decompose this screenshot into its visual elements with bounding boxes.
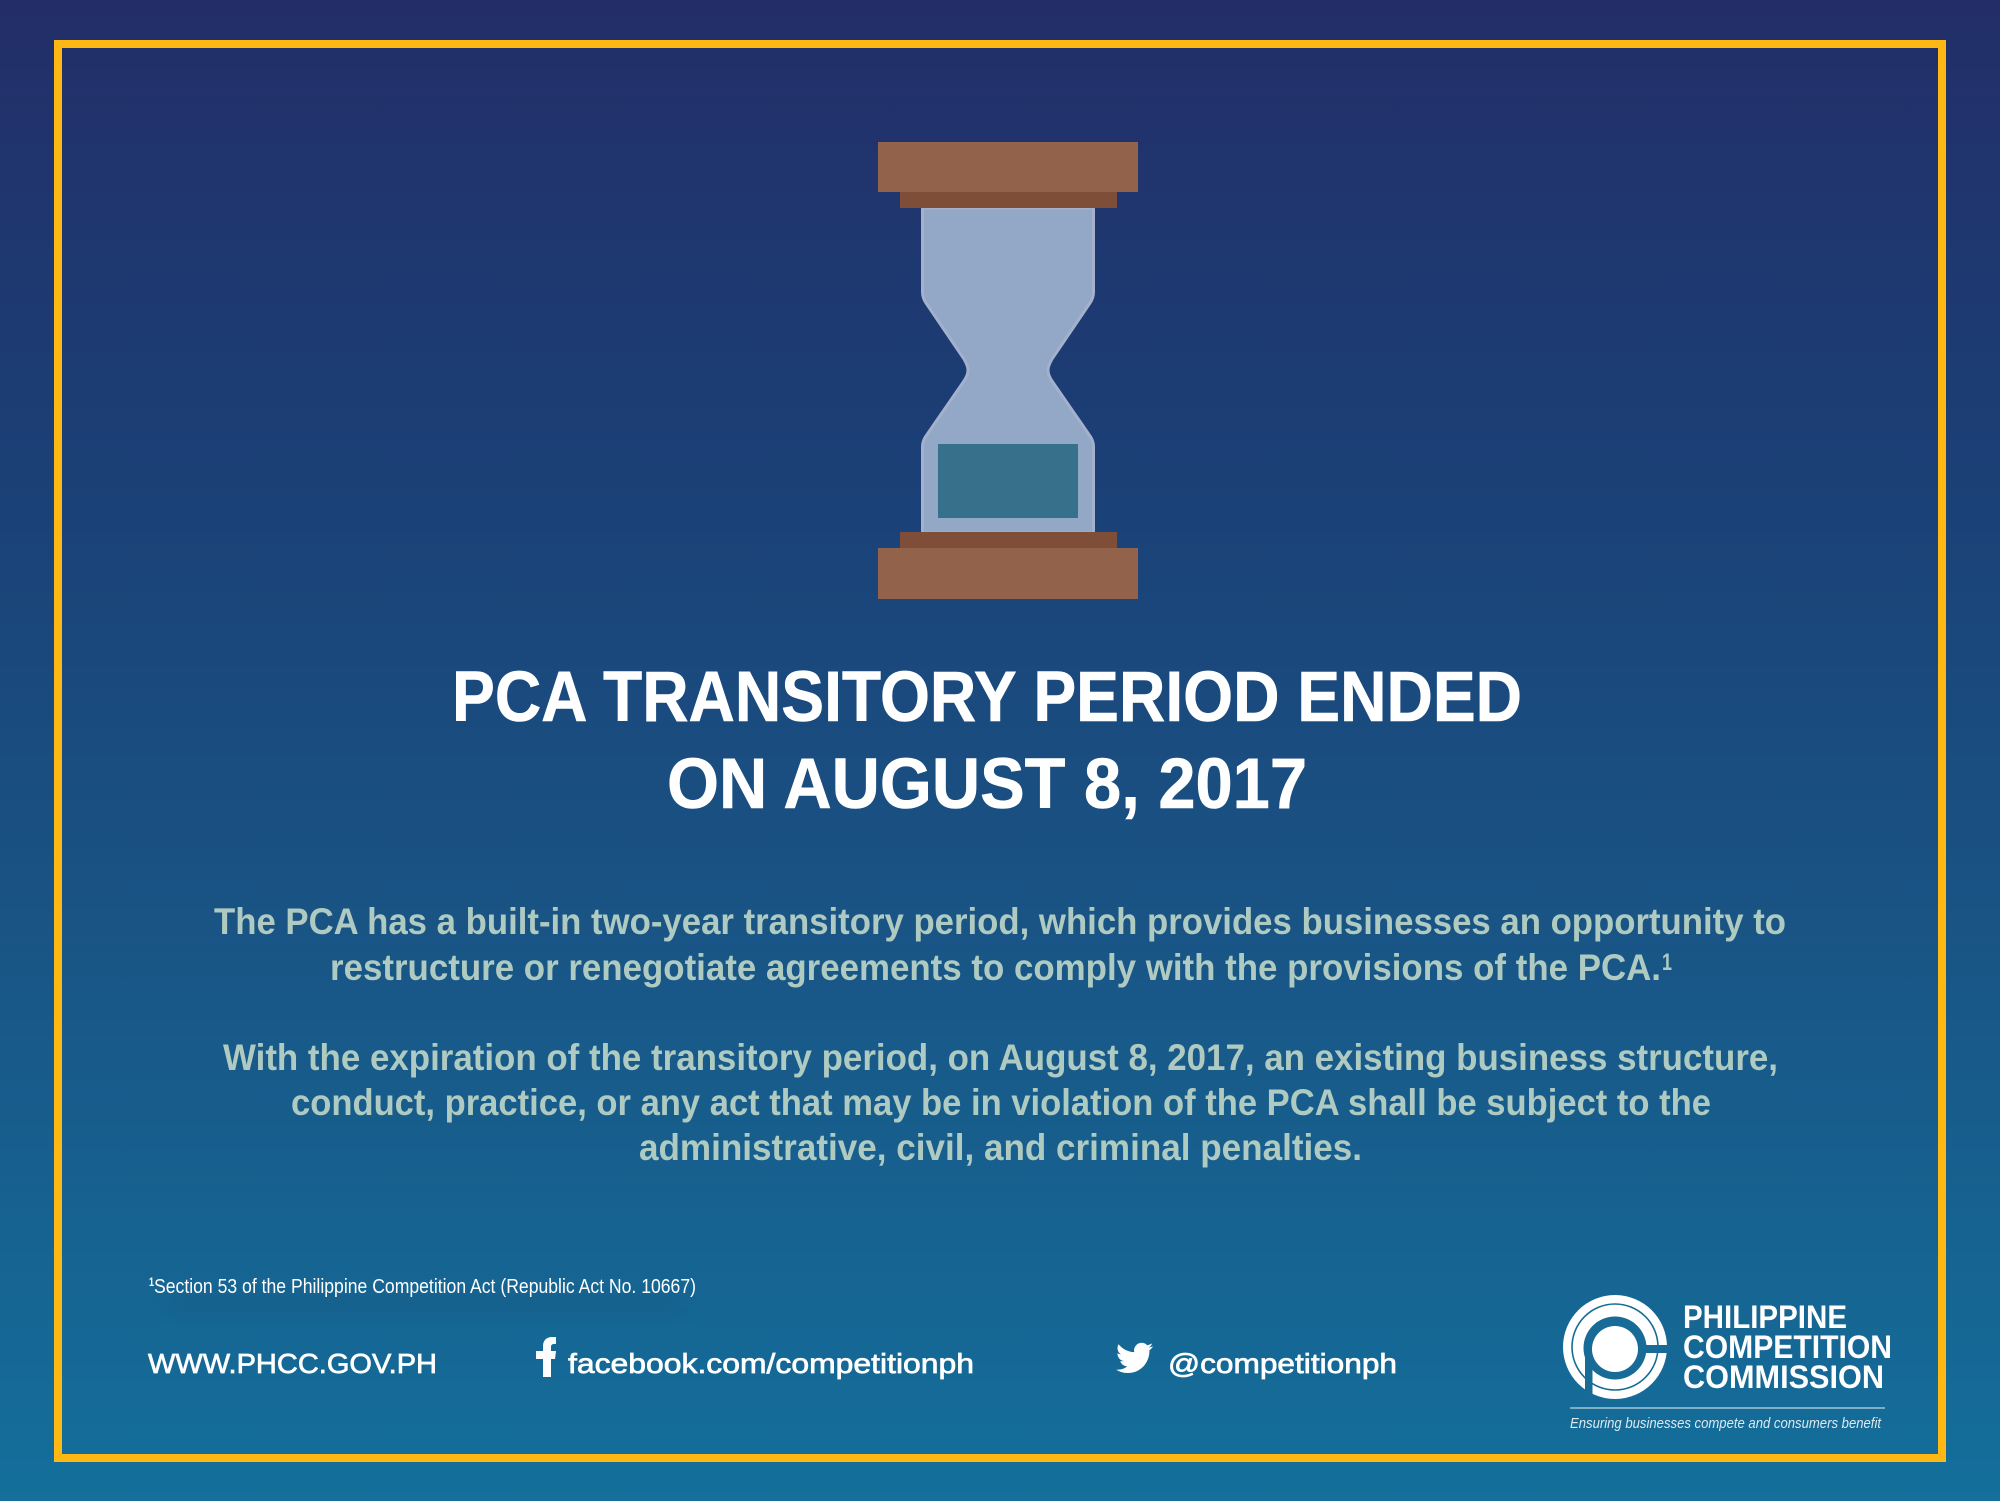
footnote: Section 53 of the Philippine Competition Act (Republic Act No. 10667) — [154, 1276, 696, 1298]
text block: transitory period explanation: conduct, practice, or any act that may be in violation of the PCA shall be subject to the — [291, 1082, 1711, 1123]
text block: transitory period explanation: With the expiration of the transitory period, on August 8, 2017, an existing business structure, — [223, 1037, 1778, 1078]
title: PCA TRANSITORY PERIOD ENDED — [452, 658, 1522, 737]
logo wordmark: COMPETITION — [1683, 1329, 1892, 1365]
logo wordmark: COMMISSION — [1683, 1359, 1884, 1395]
icon: hourglass — [878, 142, 1138, 599]
logo: Philippine Competition Commission — [1563, 1295, 1892, 1432]
facebook link: facebook.com/competitionph — [568, 1348, 974, 1379]
footnote shadow — [170, 1298, 680, 1312]
logo mark — [1563, 1295, 1670, 1402]
icon: twitter bird — [1116, 1343, 1153, 1373]
title: ON AUGUST 8, 2017 — [667, 745, 1307, 824]
text block: transitory period explanation: restructure or renegotiate agreements to comply with the provisions of the PCA. — [330, 947, 1661, 988]
text block: transitory period explanation: 1 — [1662, 949, 1672, 976]
icon: facebook — [536, 1337, 556, 1377]
title — [452, 658, 1522, 824]
text block: transitory period explanation: The PCA has a built-in two-year transitory period, which provides businesses an opportunity to — [214, 901, 1786, 942]
facebook link — [536, 1337, 974, 1379]
website link: WWW.PHCC.GOV.PH — [148, 1348, 437, 1379]
logo tagline: Ensuring businesses compete and consumers benefit — [1570, 1415, 1882, 1432]
text block: transitory period explanation — [214, 901, 1786, 1168]
logo wordmark: PHILIPPINE — [1683, 1299, 1847, 1335]
twitter link: @competitionph — [1168, 1348, 1397, 1379]
text block: transitory period explanation: administrative, civil, and criminal penalties. — [639, 1127, 1362, 1168]
logo wordmark — [1683, 1299, 1892, 1395]
footnote: 1 — [149, 1275, 154, 1289]
twitter link — [1116, 1343, 1397, 1379]
